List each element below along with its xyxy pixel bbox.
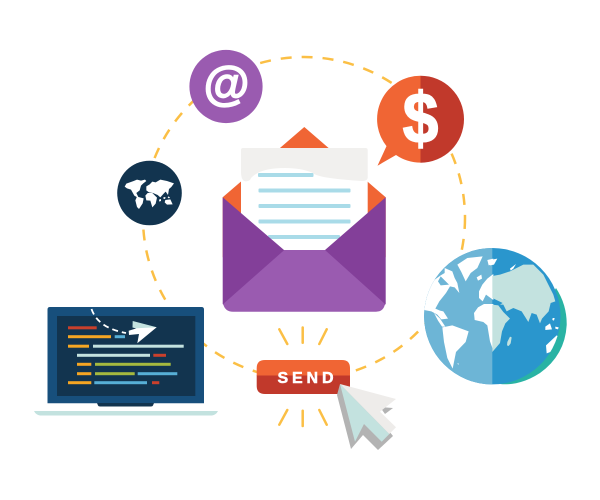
dashed flight path: [92, 309, 126, 333]
globe: [422, 248, 567, 384]
icon: dollar speech bubble: $: [403, 79, 438, 158]
icon: at sign badge: [189, 50, 263, 123]
envelope: [223, 127, 386, 312]
cursor left face: [340, 384, 389, 442]
western continents: [422, 256, 493, 369]
continents: [422, 256, 559, 369]
cursor shadow: [337, 384, 393, 450]
cursor right face: [340, 384, 396, 434]
icon: paper plane: [129, 321, 157, 343]
illustration: email marketing cycle: [34, 50, 567, 450]
globe ocean: [424, 248, 560, 384]
send button: SEND: [278, 370, 334, 387]
eastern continents: [490, 259, 559, 353]
envelope pocket front: [223, 250, 385, 312]
letter: [241, 148, 368, 258]
globe teal crescent: [500, 288, 567, 384]
code lines: [68, 326, 184, 384]
cursor arrow: [337, 384, 396, 450]
send button: [257, 360, 350, 394]
dashed circular connector: [143, 57, 465, 379]
laptop: [34, 307, 218, 416]
icon: at sign badge: @: [204, 56, 249, 110]
icon: world map badge: [117, 161, 182, 225]
icon: dollar speech bubble: [377, 76, 464, 166]
laptop screen: [57, 316, 195, 396]
laptop base: [34, 411, 218, 416]
envelope pocket sides: [223, 197, 386, 310]
cursor notch shadow: [380, 407, 393, 414]
envelope back flap: [223, 127, 386, 257]
light rays around send button: [279, 328, 327, 426]
